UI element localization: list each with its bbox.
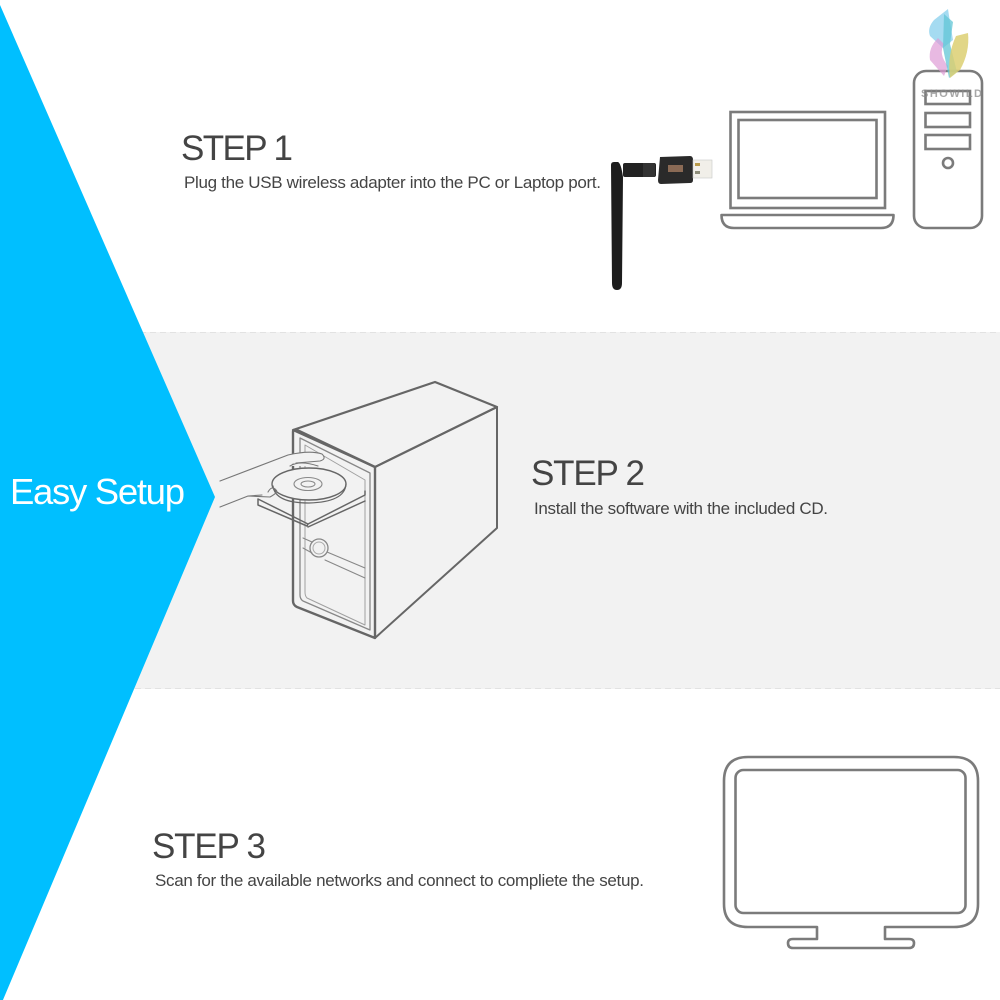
icon: laptop [722,112,894,228]
heading: step 3: STEP 3 [152,827,266,866]
tray [258,491,365,527]
icon: PC tower with CD tray and hand [220,382,497,638]
heading: step 2: STEP 2 [531,454,645,493]
watermark: SHOWILD logo [921,9,982,100]
front power button and lines [310,539,328,557]
icon: USB wireless adapter with antenna [611,156,712,290]
text: step 3 description: Scan for the available networks and connect to compliete the setup. [155,871,644,890]
text: step 2 description: Install the software with the included CD. [534,499,828,518]
disc [272,468,346,500]
icon: monitor [724,757,978,948]
panel: blue arrow banner [0,5,215,1000]
heading: step 1: STEP 1 [181,129,293,168]
icon: desktop tower [914,71,982,228]
text: step 1 description: Plug the USB wireless adapter into the PC or Laptop port. [184,173,601,192]
hand [220,452,324,481]
panel: grey step 2 band [130,332,1000,689]
watermark: SHOWILD logo: SHOWILD [921,88,982,100]
heading: Easy Setup: Easy Setup [10,471,185,512]
